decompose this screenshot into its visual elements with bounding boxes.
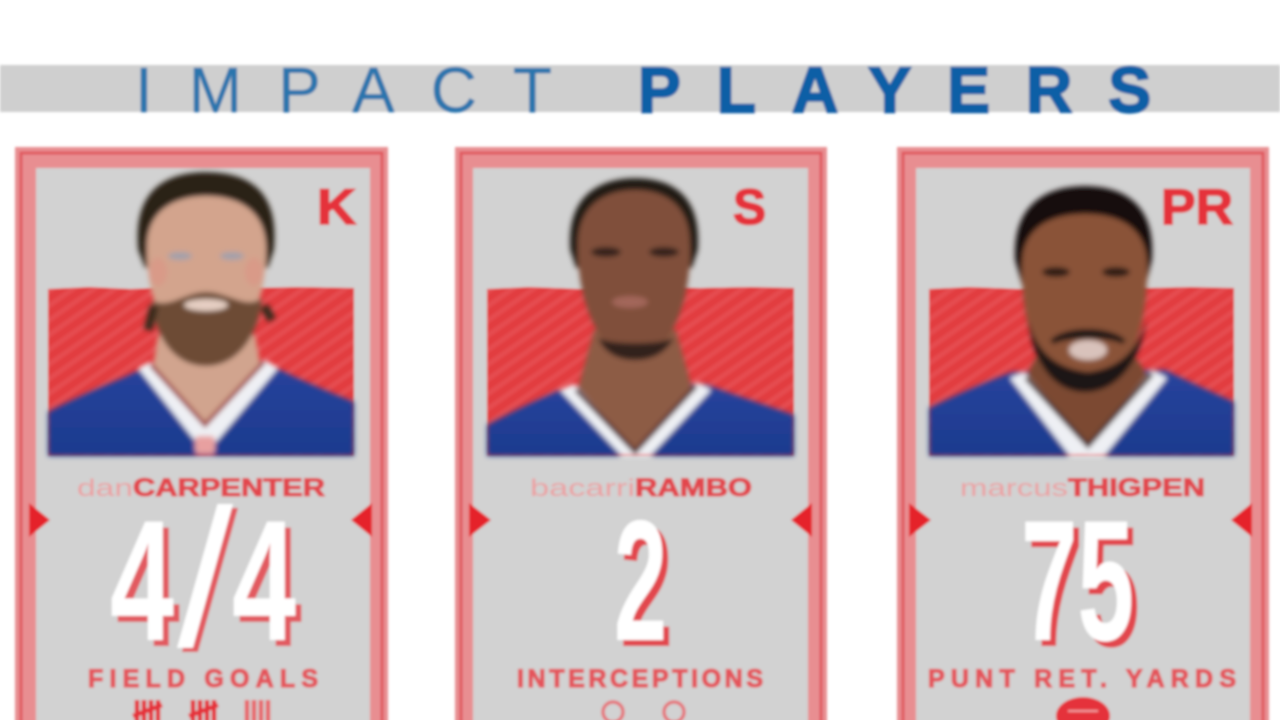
stat label: INTERCEPTIONS <box>517 665 763 693</box>
stat number: 2 <box>620 491 673 683</box>
arrow markers <box>469 503 812 537</box>
stat number: 4 <box>238 491 302 683</box>
player name: RAMBO <box>635 474 752 502</box>
player name: CARPENTER <box>133 474 325 502</box>
red backdrop <box>487 287 794 456</box>
position: K: K <box>317 179 356 235</box>
stat number <box>110 469 302 692</box>
player name <box>77 474 325 502</box>
stat number: 75 <box>1021 485 1134 677</box>
stat label: FIELD GOALS <box>88 665 318 693</box>
position: PR: PR <box>1161 179 1233 235</box>
stat number: 4 <box>110 485 174 677</box>
red backdrop <box>929 287 1234 456</box>
player name: marcus <box>960 475 1068 502</box>
icon: tally marks <box>133 700 268 720</box>
arrow markers <box>909 503 1252 537</box>
panel: Dan Carpenter card <box>15 147 388 720</box>
panel: Marcus Thigpen card <box>897 147 1269 720</box>
stat number: / <box>182 473 239 692</box>
title: players: PLAYERS <box>638 54 1151 126</box>
title: impact: IMPACT <box>135 54 552 126</box>
red backdrop <box>48 287 354 456</box>
player name: bacarri <box>530 475 635 502</box>
icon: interception marks <box>603 702 684 720</box>
stat number: 4 <box>232 485 296 677</box>
panel: Bacarri Rambo card <box>455 147 827 720</box>
stat number <box>1021 485 1140 683</box>
arrow markers <box>29 503 372 537</box>
player photo <box>487 178 794 456</box>
stat number <box>614 485 673 683</box>
icon: football <box>1056 697 1110 720</box>
player name <box>960 474 1205 502</box>
stat number: 2 <box>614 485 667 677</box>
position: S: S <box>733 179 766 235</box>
player name <box>530 474 752 502</box>
player photo <box>929 186 1234 456</box>
stat number: 4 <box>116 491 180 683</box>
stat number: / <box>177 469 234 688</box>
stat number: 75 <box>1027 491 1140 683</box>
player name: dan <box>77 475 133 502</box>
title band <box>0 54 1280 126</box>
stat label: PUNT RET. YARDS <box>928 665 1236 693</box>
player photo <box>48 172 354 456</box>
player name: THIGPEN <box>1068 474 1205 502</box>
